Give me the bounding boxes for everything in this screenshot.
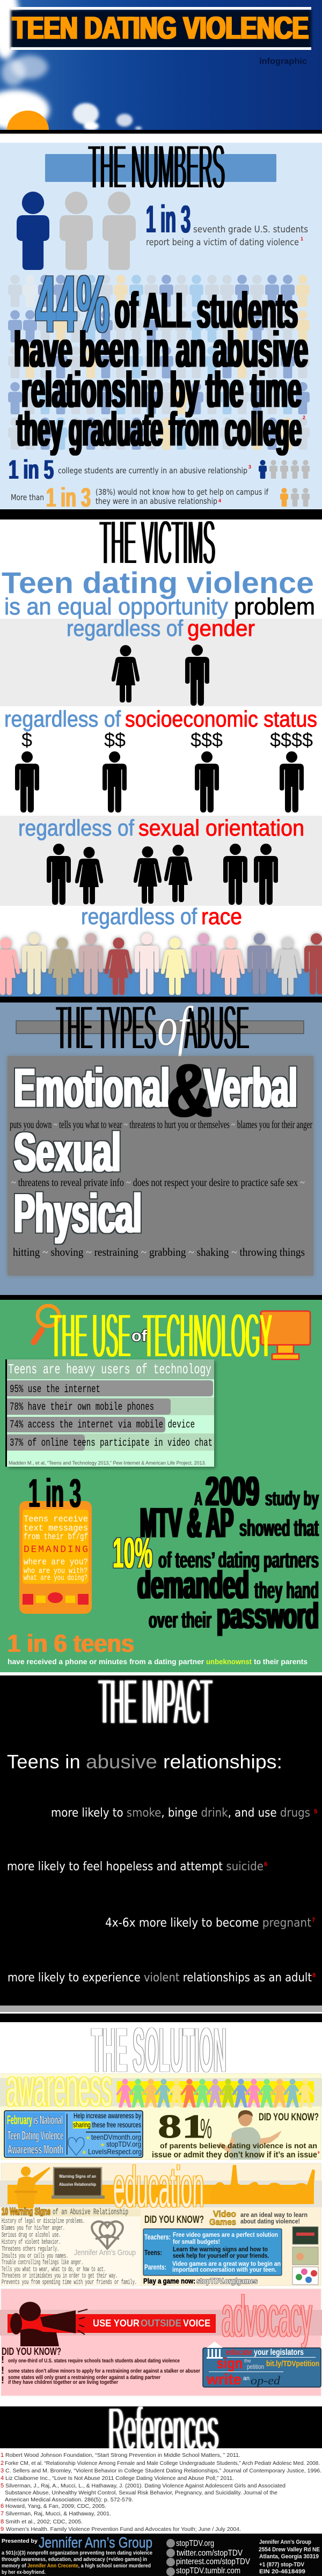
reference list: Smith et al., 2002; CDC, 2005. <box>5 2519 83 2525</box>
stat: 1 in 5: college students are currently in an abusive relationship <box>58 466 247 475</box>
stat: 81 percent: 81 <box>158 2109 206 2145</box>
stat: 1 in 3 with phone: DEMANDING <box>24 1545 88 1555</box>
stat: 1 in 6 teens: 1 in 6 teens <box>8 1629 134 1657</box>
reference list: 9 <box>1 2526 4 2533</box>
row: socioeconomic status: $$$ <box>191 729 223 751</box>
logo: jennifer ann's group <box>74 2221 136 2257</box>
type: emotional and verbal: & <box>166 1048 213 1132</box>
icon: blackboard: Warning Signs of an <box>59 2174 96 2179</box>
stat: more than 1 in 3: 4 <box>218 498 221 503</box>
table: teen technology use <box>5 1359 214 1467</box>
row: sexual orientation: sexual orientation <box>138 815 304 840</box>
callout: february awareness month: is National <box>33 2113 63 2127</box>
divider band <box>0 1295 322 1300</box>
panel: advocacy <box>0 2284 322 2396</box>
stat: 44 percent: 2 <box>303 415 305 420</box>
subheading: relationships: <box>163 1751 282 1773</box>
video games callout: stopTDV.org/games <box>196 2277 258 2285</box>
presenter: Jennifer Ann’s Group <box>39 2534 152 2551</box>
stat: 1 in 6 teens: unbeknownst <box>206 1658 252 1666</box>
callout: february awareness month <box>4 2111 143 2157</box>
callout: legislators: educate <box>226 2348 252 2357</box>
footnote 8: 8 <box>312 1972 316 1979</box>
warning signs heading: 10 Warning Signs <box>2 2206 50 2217</box>
stat: 81 percent: 9 <box>318 2151 320 2155</box>
stat: more than 1 in 3: they were in an abusive relationship <box>96 496 217 506</box>
bar: internet <box>7 1380 213 1396</box>
info box: Teachers: <box>144 2233 171 2241</box>
divider band <box>0 509 322 519</box>
callout: 2009 study: over their <box>149 1607 211 1633</box>
content card <box>8 1056 313 1276</box>
video games callout: Video <box>213 2209 236 2219</box>
tagline: is an equal opportunity <box>4 594 228 620</box>
presenter: Presented by <box>2 2538 38 2544</box>
stat: 81 percent: of parents believe dating violence is not an <box>160 2141 317 2150</box>
did you know list: some states will only grant a restraining order against a dating partner <box>8 2374 160 2381</box>
did you know list <box>1 2346 200 2385</box>
paper chain of people <box>116 2079 314 2107</box>
panel: the impact <box>0 1666 322 2006</box>
tagline: Teen dating violence <box>2 566 314 599</box>
callout: february awareness month: teenDVmonth.org <box>91 2133 141 2141</box>
callout: february awareness month: LoveIsRespect.org <box>88 2147 142 2156</box>
bar: internet: 95% use the internet <box>10 1384 100 1396</box>
tagline <box>2 566 315 620</box>
info box: Learn the warning signs and how to <box>173 2245 268 2253</box>
icon: blackboard <box>52 2168 105 2199</box>
stat: 81 percent <box>152 2109 320 2160</box>
stat: 1 in 3 with phone <box>19 1470 92 1614</box>
social links: stopTDV.tumblr.com <box>176 2566 240 2575</box>
did you know list: ! <box>1 2365 4 2376</box>
icon: teacher at podium <box>14 2167 50 2209</box>
heading bar <box>16 1021 304 1034</box>
header banner <box>0 0 322 134</box>
info box: Free video games are a perfect solution <box>173 2231 278 2238</box>
footnote 5: 5 <box>314 1809 317 1815</box>
callout: legislators: op-ed <box>251 2374 281 2387</box>
tagline: problem <box>234 594 315 620</box>
footer <box>0 2534 322 2576</box>
social links: pinterest.com/stopTDV <box>176 2557 250 2566</box>
stat: 1 in 3 with phone: from their bf/gf <box>24 1532 88 1542</box>
info box: important conversation with your teen. <box>172 2266 276 2273</box>
reference list: Howard, Yang, & Fan, 2009; CDC, 2005. <box>5 2503 106 2509</box>
stat: 1 in 6 teens <box>8 1629 308 1666</box>
reference list: Substance Abuse, Unhealthy Weight Control, Sexual Risk Behavior, Pregnancy, and Suicidality. Journal of the <box>5 2490 277 2496</box>
logo: jennifer ann's group: Jennifer Ann’s Group <box>74 2248 136 2257</box>
type: physical: hitting ~ shoving ~ restraining ~ grabbing ~ shaking ~ throwing things <box>13 1246 305 1258</box>
warning signs heading: of an Abusive Relationship <box>53 2207 128 2217</box>
subheading: Teens in <box>7 1751 86 1773</box>
warning signs list: Insults you or calls you names. <box>2 2252 68 2260</box>
icon: stars: ★ <box>82 2149 87 2156</box>
ground band <box>0 130 322 134</box>
warning signs list: Tells you what to wear, what to do, or how to act. <box>2 2265 106 2273</box>
warning signs list: Serious drug or alcohol use. <box>2 2231 61 2239</box>
warning signs list: Blames you for his/her anger. <box>2 2224 65 2232</box>
stat: 1 in 3 <box>146 198 308 248</box>
reference list: Silverman, Raj, Mucci, & Hathaway, 2001. <box>5 2511 111 2517</box>
row: gender: regardless of <box>67 616 183 641</box>
panel: advocacy: USE YOUR <box>93 2318 140 2329</box>
reference list: 4 <box>1 2475 4 2482</box>
heading bar <box>45 154 276 182</box>
icon: capitol building <box>207 2341 223 2359</box>
reference list: Silverman, J., Raj, A., Mucci, L., & Hathaway, J. (2001). Dating Violence Against Adolescent Girls and Associated <box>5 2483 286 2489</box>
panel: the solution <box>0 2015 322 2396</box>
callout: february awareness month: Help increase awareness by <box>74 2111 141 2120</box>
bar: mobile internet <box>7 1417 195 1432</box>
heading: THE USE <box>50 1300 130 1371</box>
panel: awareness: awareness <box>6 2058 112 2118</box>
divider band <box>0 997 322 1002</box>
address: +1 (877) stop-TDV <box>259 2562 305 2568</box>
did you know list: some states don’t allow minors to apply for a restraining order against a stalker or abuser <box>8 2368 200 2374</box>
video games callout: are an ideal way to learn <box>240 2212 308 2219</box>
callout: legislators: sign <box>217 2355 243 2372</box>
presenter: a 501(c)(3) nonprofit organization preventing teen dating violence <box>2 2550 152 2556</box>
reference list: 6 <box>1 2503 4 2509</box>
info box <box>143 2229 282 2275</box>
stat: 1 in 3 with phone: what are you doing? <box>24 1574 87 1583</box>
stat: 1 in 3 with phone: Teens receive <box>24 1514 88 1525</box>
reference list <box>1 2452 321 2533</box>
icon: monitor <box>261 1311 310 1359</box>
stat: more than 1 in 3: (38%) would not know how to get help on campus if <box>96 487 269 497</box>
reference list: 1 <box>1 2452 4 2458</box>
callout: legislators: your legislators <box>254 2348 304 2357</box>
callout: legislators <box>203 2341 321 2388</box>
reference list: Robert Wood Johnson Foundation, “Start Strong Prevention in Middle School Matters, ” 2011. <box>5 2452 240 2458</box>
panel: types of abuse <box>0 992 322 1295</box>
callout: legislators: write <box>206 2371 241 2388</box>
type: physical: Physical <box>14 1183 142 1244</box>
presenter <box>2 2534 152 2575</box>
reference list: 5 <box>1 2483 4 2489</box>
presenter: through awareness, education, and advocacy (+video games) in <box>2 2557 147 2563</box>
impact: pregnancy: 4x-6x more likely to become pregnant <box>105 1916 311 1930</box>
icon: stars: ★ <box>85 2135 91 2141</box>
bar: mobile phones <box>7 1399 171 1415</box>
panel: advocacy: VOICE <box>183 2318 210 2329</box>
callout: february awareness month: Teen Dating Violence <box>8 2128 63 2142</box>
callout: 2009 study: 10% <box>113 1529 152 1577</box>
type: sexual <box>11 1122 305 1189</box>
impact: substances: more likely to smoke, binge drink, and use drugs <box>51 1806 310 1820</box>
panel: advocacy: OUTSIDE <box>141 2318 181 2329</box>
row: socioeconomic status: $ <box>21 729 32 751</box>
warning signs list: Trouble controlling feelings like anger. <box>2 2258 83 2266</box>
icon: heart <box>68 2138 84 2155</box>
impact: suicide: more likely to feel hopeless and attempt suicide <box>7 1860 264 1874</box>
type: emotional and verbal <box>10 1048 312 1132</box>
footnote 6: 6 <box>264 1861 267 1868</box>
reference list: Women’s Health. Family Violence Prevention Fund and Advocates for Youth; June / July 2004. <box>6 2526 241 2533</box>
info box: Parents: <box>144 2263 166 2271</box>
warning signs list: History of legal or discipline problems. <box>2 2217 85 2225</box>
icon: sun <box>7 111 49 130</box>
panel: awareness <box>0 2058 322 2160</box>
info box: Video games are a great way to begin an <box>172 2260 281 2267</box>
video games callout: about dating violence! <box>240 2219 300 2225</box>
row: sexual orientation: regardless of <box>18 815 134 840</box>
row: gender <box>0 616 322 706</box>
reference list: Liz Claiborne Inc., “Love Is Not Abuse 2011 College Dating Violence and Abuse Poll,” 2011. <box>5 2475 234 2482</box>
reference list: C. Sellers and M. Bromley, “Violent Behavior in College Student Dating Relationships,” Journal of Contemporary Justice, 1996. <box>5 2468 321 2474</box>
reference list: American Medical Association. 286(5): p. 572-579. <box>5 2497 133 2503</box>
stat: more than 1 in 3: More than <box>11 493 44 502</box>
stat: 1 in 3 with phone: 1 in 3 <box>28 1470 81 1516</box>
stat: 1 in 3: 1 <box>301 236 303 241</box>
icon: 1 in 3 people <box>17 192 136 270</box>
heading: of <box>157 996 194 1057</box>
panel: education <box>0 2154 322 2286</box>
reference list: 7 <box>1 2511 4 2517</box>
subtitle: infographic <box>259 57 307 66</box>
type: emotional and verbal: Emotional <box>14 1057 170 1118</box>
address <box>259 2539 320 2575</box>
icon: audience silhouette <box>210 2165 315 2204</box>
icon: shrugging man <box>218 2110 282 2160</box>
white rule top <box>11 7 311 10</box>
presenter: by her ex-boyfriend. <box>2 2570 46 2575</box>
crowd of people <box>8 275 310 450</box>
row: socioeconomic status <box>4 706 317 813</box>
callout: legislators: petition <box>247 2363 264 2370</box>
warning signs list: Threatens others regularly. <box>2 2245 59 2253</box>
warning signs list: History of violent behavior. <box>2 2238 61 2246</box>
warning signs list: Threatens or intimidates you in order to get their way. <box>2 2272 118 2280</box>
stat: 1 in 3 with phone: text messages <box>24 1524 88 1534</box>
row: socioeconomic status: regardless of <box>4 706 121 731</box>
stat: 1 in 6 teens: have received a phone or minutes from a dating partner <box>8 1658 206 1666</box>
callout: february awareness month: Awareness Month <box>8 2142 63 2156</box>
icon: girl with megaphone <box>10 2302 87 2346</box>
type: sexual: Sexual <box>14 1122 121 1183</box>
row: socioeconomic status: $$$$ <box>270 729 313 751</box>
row: race: race <box>201 904 242 929</box>
subheading: abusive <box>86 1751 157 1773</box>
impact: violent relationships: more likely to experience violent relationships as an adult <box>8 1971 312 1985</box>
stat: 1 in 3: seventh grade U.S. students <box>193 224 308 235</box>
heading: of <box>131 1327 148 1345</box>
row: race: regardless of <box>81 904 197 929</box>
panel: references <box>0 2395 322 2533</box>
row: sexual orientation <box>0 815 322 906</box>
stat: 1 in 5 <box>9 455 310 485</box>
game thumbnails <box>292 2227 318 2285</box>
callout: 2009 study <box>113 1469 319 1636</box>
video games callout: Games <box>209 2217 236 2227</box>
white rule bottom <box>11 47 311 50</box>
video games callout <box>143 2209 318 2285</box>
icon: stars <box>82 2135 105 2156</box>
social links: twitter.com/stopTDV <box>177 2549 243 2558</box>
did you know list: ! <box>1 2354 4 2365</box>
panel: the victims <box>0 507 322 997</box>
stat: 1 in 3: report being a victim of dating violence <box>146 237 299 248</box>
stat: 1 in 5: 1 in 5 <box>9 455 54 485</box>
stat: 1 in 3: 1 in 3 <box>146 198 191 241</box>
info box: seek help for yourself or your friends. <box>173 2252 269 2259</box>
presenter: memory of Jennifer Ann Crecente, a high school senior murdered <box>2 2563 151 2569</box>
social links: stopTDV.org <box>176 2539 214 2548</box>
did you know list: if they have children together or are living together <box>8 2379 118 2385</box>
bar: mobile phones: 78% have their own mobile phones <box>10 1401 154 1414</box>
callout: february awareness month: stopTDV.org <box>106 2140 141 2148</box>
info box: for small budgets! <box>173 2238 220 2245</box>
address: Jennifer Ann’s Group <box>259 2539 311 2545</box>
icon: stars: ★ <box>100 2142 105 2148</box>
callout: legislators: an <box>243 2375 250 2382</box>
bar: video chat <box>7 1435 213 1451</box>
icon: phone <box>19 1501 92 1614</box>
did you know list: ! <box>1 2375 4 2385</box>
row: race <box>0 904 322 997</box>
type: physical <box>13 1183 305 1258</box>
warning signs list: Prevents you from spending time with your friends or family. <box>2 2278 137 2286</box>
reference list: 8 <box>1 2519 4 2525</box>
address: Atlanta, Georgia 30319 <box>259 2553 319 2560</box>
panel: use of technology <box>0 1300 322 1672</box>
video games callout: DID YOU KNOW? <box>144 2214 204 2226</box>
did you know list: DID YOU KNOW? <box>2 2346 61 2358</box>
panel: the numbers <box>0 131 322 513</box>
did you know list: only one-third of U.S. states require schools teach students about dating violence <box>8 2358 180 2364</box>
stat: 81 percent: % <box>200 2113 212 2145</box>
subheading <box>7 1751 282 1773</box>
callout: 2009 study: A <box>194 1488 202 1510</box>
callout: february awareness month: sharing these free resources <box>73 2120 141 2129</box>
info box: Teens: <box>144 2248 162 2257</box>
stat: 44 percent: 44% <box>35 259 109 349</box>
video games callout: Play a game now: <box>143 2277 195 2285</box>
warning signs list <box>1 2216 141 2286</box>
stat: 1 in 3 with phone: who are you with? <box>24 1567 87 1576</box>
icon: blackboard: Abusive Relationship <box>59 2182 96 2187</box>
stat: 1 in 6 teens: to their parents <box>254 1658 308 1666</box>
stat: 1 in 3 with phone: where are you? <box>24 1557 88 1568</box>
address: EIN 20-4618499 <box>259 2568 305 2575</box>
icon: magnifying glass <box>34 1306 59 1342</box>
reference list: 2 <box>1 2460 4 2467</box>
stat: 44 percent <box>14 259 308 456</box>
bar: video chat: 37% of online teens participate in video chat <box>10 1437 213 1450</box>
footnote 7: 7 <box>312 1917 315 1923</box>
social links <box>166 2539 250 2576</box>
table: teen technology use: Teens are heavy users of technology <box>8 1362 211 1378</box>
reference list: 3 <box>1 2468 4 2474</box>
source: Madden M., et al, “Teens and Technology 2013,” Pew Internet & American Life Project, 2013. <box>9 1460 206 1466</box>
callout: legislators: the <box>244 2358 251 2363</box>
row: gender: gender <box>187 616 255 641</box>
callout: february awareness month: February <box>7 2113 32 2127</box>
warning signs heading <box>1 2206 141 2217</box>
callout: 2009 study: 2009 <box>206 1469 259 1514</box>
bar: mobile internet: 74% access the internet via mobile device <box>10 1419 195 1431</box>
stat: 1 in 5: 3 <box>248 464 251 470</box>
stat: more than 1 in 3 <box>11 482 310 513</box>
stat: more than 1 in 3: 1 in 3 <box>46 482 91 513</box>
row: socioeconomic status: $$ <box>104 729 126 751</box>
